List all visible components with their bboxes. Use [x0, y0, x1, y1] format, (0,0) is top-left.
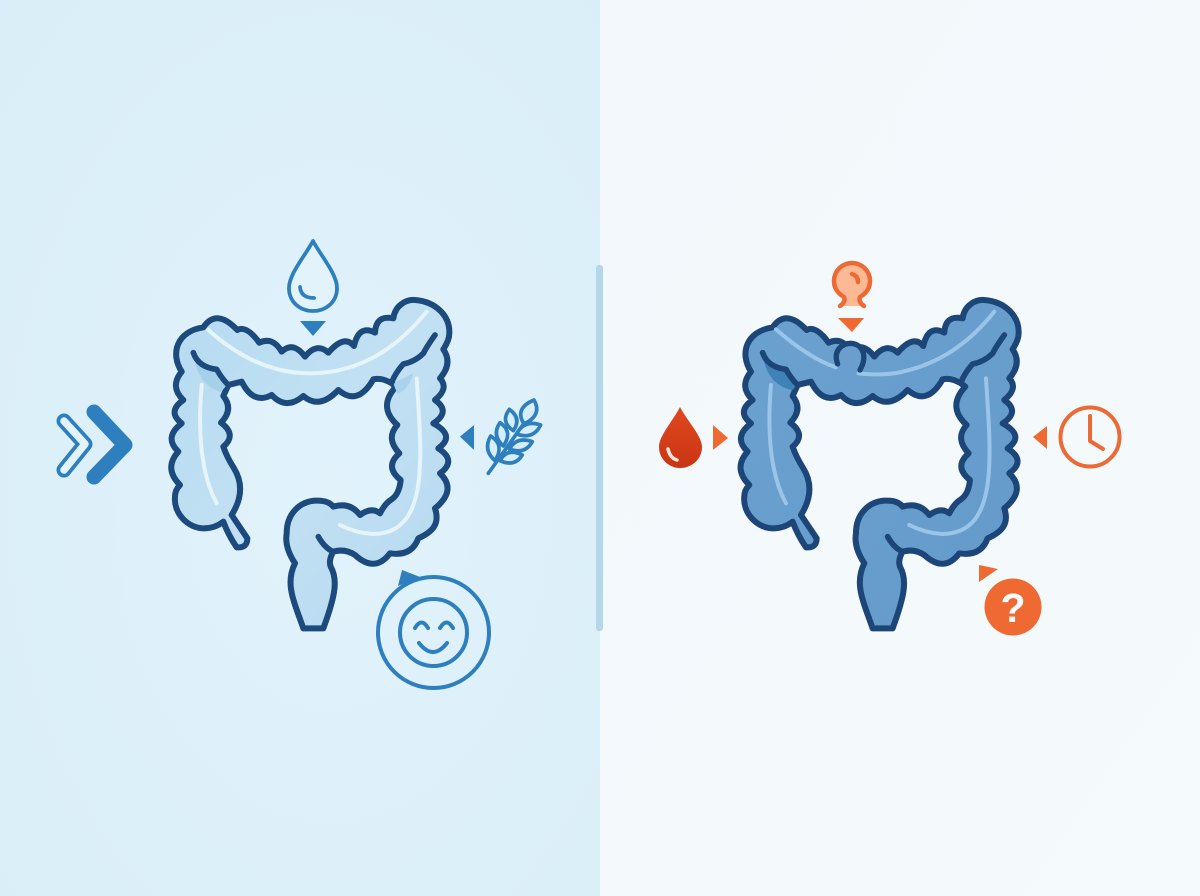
- icon: blood drop with arrow: [659, 407, 728, 468]
- fold lines: [763, 335, 1004, 552]
- icon: double chevron: [64, 412, 125, 477]
- inner highlights: [769, 312, 994, 534]
- icon: light bulb with arrow: [834, 263, 870, 332]
- icon: clock with arrow: [1033, 408, 1120, 466]
- fold shading: [763, 353, 796, 390]
- polyp bump: [836, 343, 864, 370]
- inner highlights: [200, 312, 427, 534]
- healthy colon illustration: [171, 300, 449, 628]
- panel: healthy side background: [0, 0, 600, 896]
- icon: question mark with arrow: [979, 565, 1042, 636]
- fold shading: [193, 353, 227, 392]
- icon: smiley in circle: [378, 570, 489, 688]
- unhealthy colon illustration: [741, 300, 1019, 628]
- icon: wheat with arrow: [460, 400, 541, 473]
- fold lines: [193, 335, 435, 552]
- icon: question mark with arrow: ?: [1000, 585, 1026, 631]
- center divider: [596, 265, 603, 631]
- panel: unhealthy side background: [600, 0, 1200, 896]
- icon: water drop with arrow: [289, 241, 337, 336]
